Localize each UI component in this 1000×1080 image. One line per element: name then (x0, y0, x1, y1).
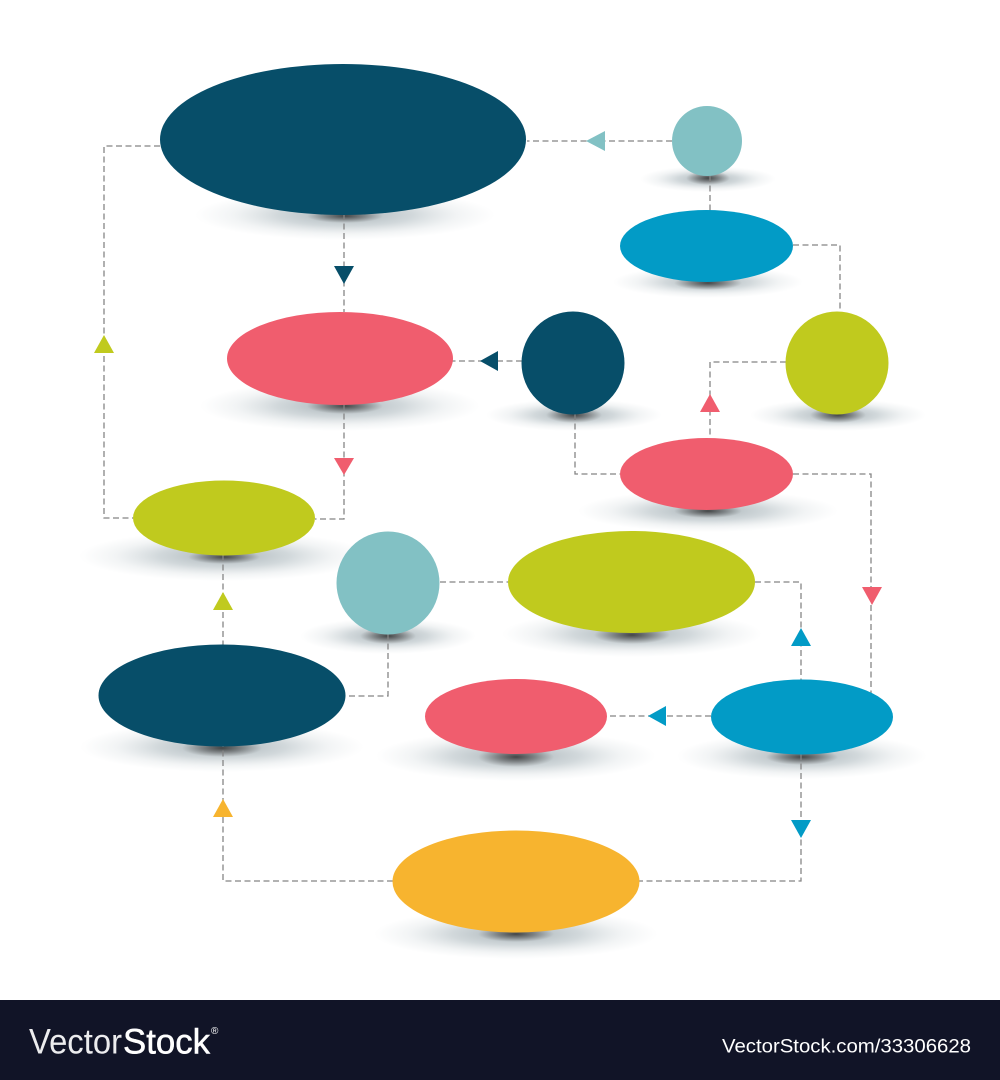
arrow: amber up (213, 799, 233, 817)
arrow: navy down (334, 266, 354, 284)
arrow: teal left (586, 131, 605, 151)
node: coral ellipse (227, 312, 453, 405)
arrow: lime up left (213, 592, 233, 610)
node: navy ellipse left (98, 644, 346, 746)
node: small teal circle (672, 106, 742, 176)
arrow: coral down right (862, 587, 882, 605)
node: navy circle (522, 312, 624, 414)
node: blue ellipse right (711, 680, 893, 754)
node: teal circle (336, 532, 440, 634)
arrow: coral down (334, 458, 354, 475)
footer: VectorStock logo (29, 1022, 219, 1062)
node: coral ellipse centre (425, 679, 607, 754)
arrow: blue down (791, 820, 811, 838)
arrow: blue left (648, 706, 666, 726)
node: lime ellipse centre (508, 531, 755, 633)
footer: url and id: VectorStock.com/33306628 (722, 1036, 971, 1058)
shadows (79, 166, 927, 959)
footer: VectorStock logo: Vector (29, 1022, 122, 1062)
dashed connectors (104, 141, 871, 881)
arrow: blue up (791, 628, 811, 646)
footer: VectorStock logo: ® (211, 1026, 219, 1037)
node: lime ellipse left (133, 480, 315, 556)
node: lime circle (786, 312, 888, 414)
arrow: coral up (700, 394, 720, 412)
footer bar (0, 1000, 1000, 1080)
node: large navy ellipse (160, 64, 526, 215)
node: blue ellipse (620, 210, 793, 282)
node: coral ellipse right (620, 438, 793, 510)
node: amber ellipse (392, 830, 640, 932)
footer: VectorStock logo: Stock (123, 1022, 210, 1062)
arrow: navy left (480, 351, 498, 371)
arrow: lime up (94, 335, 114, 353)
